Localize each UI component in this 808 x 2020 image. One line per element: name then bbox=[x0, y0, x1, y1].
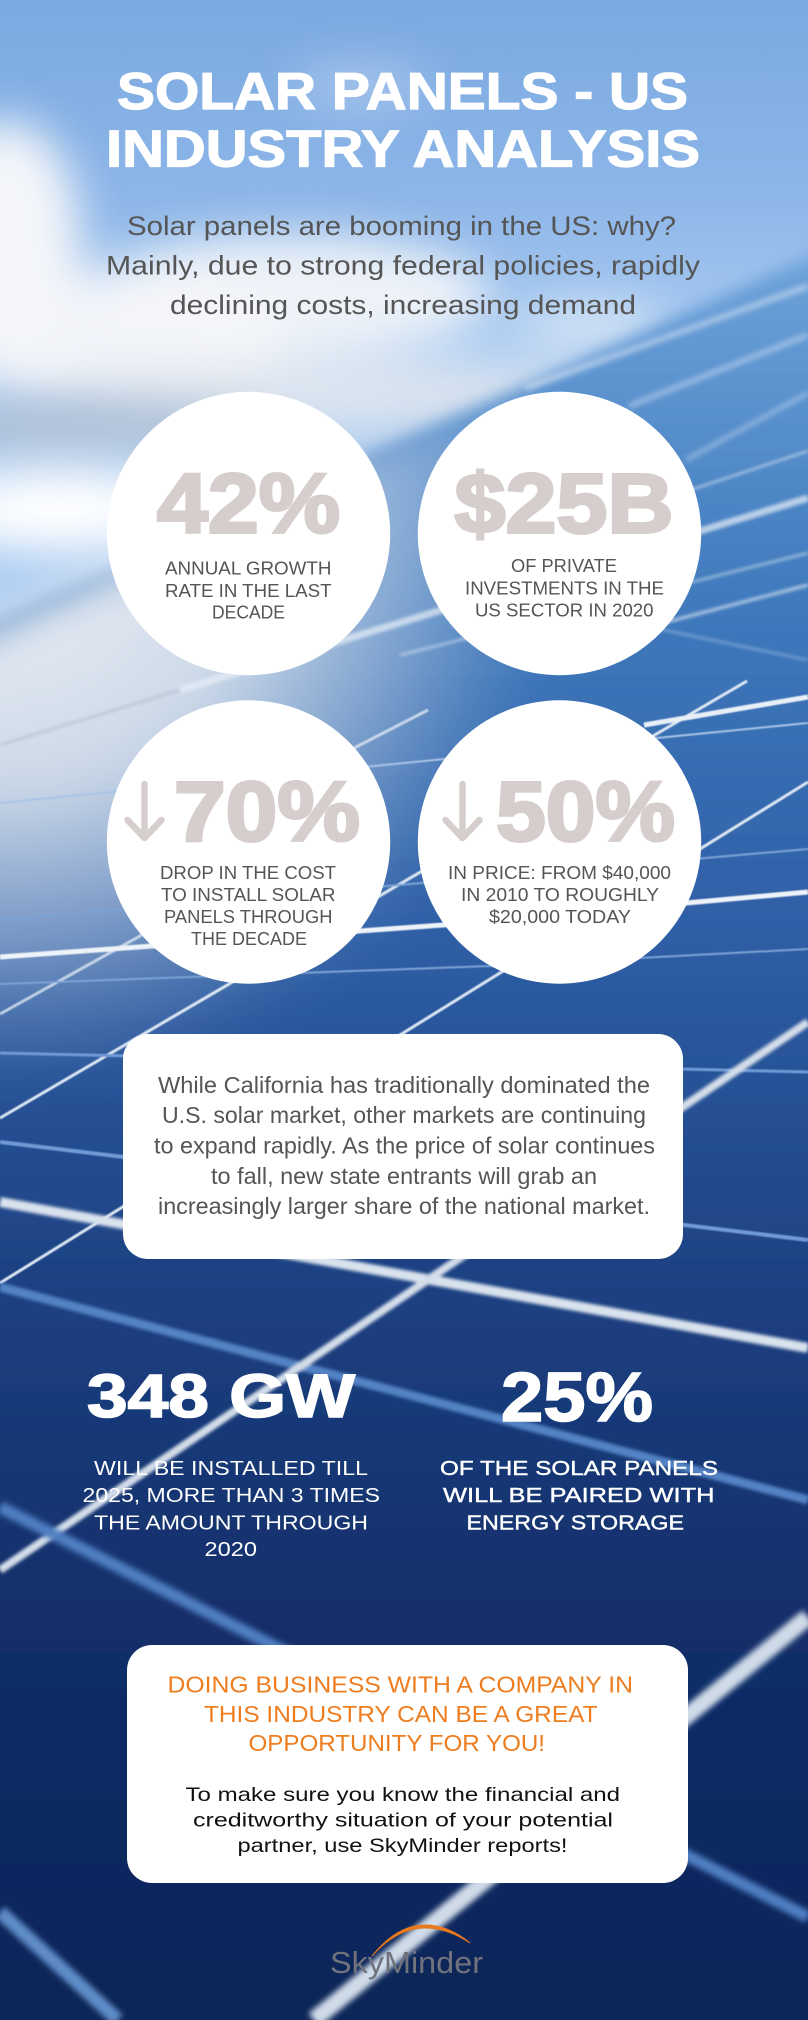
stat circle: 42% annual growth: DECADE bbox=[212, 602, 285, 622]
call to action heading bbox=[168, 1672, 633, 1756]
stat circle: 70% cost drop: 70% bbox=[174, 764, 360, 858]
stat circle: $25B private investments: OF PRIVATE bbox=[511, 555, 617, 576]
stat circle: 70% cost drop: THE DECADE bbox=[191, 928, 307, 949]
title: INDUSTRY ANALYSIS bbox=[106, 120, 700, 178]
logo: SkyMinder: SkyMinder bbox=[330, 1945, 483, 1980]
icon: down arrow bbox=[446, 784, 480, 838]
call to action heading: THIS INDUSTRY CAN BE A GREAT bbox=[204, 1701, 598, 1727]
stat circle: $25B private investments bbox=[418, 392, 701, 675]
panel: California market text: While California has traditionally dominated the bbox=[158, 1072, 650, 1098]
panel: call to action bbox=[127, 1645, 688, 1883]
stat: 25% paired with storage: ENERGY STORAGE bbox=[466, 1512, 684, 1534]
stat circle: $25B private investments: $25B bbox=[454, 456, 674, 550]
logo: SkyMinder bbox=[330, 1925, 483, 1980]
stat: 348 GW installed: WILL BE INSTALLED TILL bbox=[94, 1457, 368, 1480]
panel: California market text: to expand rapidly. As the price of solar continues bbox=[154, 1132, 655, 1158]
title: SOLAR PANELS - US bbox=[117, 63, 688, 121]
subtitle: Solar panels are booming in the US: why? bbox=[127, 211, 676, 241]
stat circle: 70% cost drop bbox=[107, 700, 390, 984]
panel: California market text: increasingly larger share of the national market. bbox=[158, 1193, 650, 1219]
stat: 25% paired with storage: 25% bbox=[501, 1358, 653, 1436]
subtitle bbox=[106, 211, 701, 320]
stat: 348 GW installed: 348 GW bbox=[87, 1362, 356, 1430]
call to action body: To make sure you know the financial and bbox=[186, 1784, 620, 1806]
call to action body: creditworthy situation of your potential bbox=[193, 1810, 613, 1832]
stat circle: 50% price drop: IN PRICE: FROM $40,000 bbox=[448, 862, 671, 883]
title bbox=[106, 63, 700, 178]
call to action heading: OPPORTUNITY FOR YOU! bbox=[248, 1730, 545, 1756]
stat circle: $25B private investments: INVESTMENTS IN THE bbox=[465, 578, 664, 598]
call to action body: partner, use SkyMinder reports! bbox=[238, 1835, 568, 1857]
stat circle: 42% annual growth bbox=[107, 392, 390, 675]
stat circle: 42% annual growth: RATE IN THE LAST bbox=[165, 580, 332, 601]
stat circle: 42% annual growth: 42% bbox=[157, 456, 340, 550]
stat: 348 GW installed: 2020 bbox=[204, 1538, 257, 1561]
panel: California market text bbox=[123, 1034, 683, 1259]
icon: down arrow bbox=[128, 784, 162, 838]
stat: 25% paired with storage bbox=[440, 1358, 718, 1534]
stat circle: 70% cost drop: PANELS THROUGH bbox=[164, 906, 332, 927]
stat circle: $25B private investments: US SECTOR IN 2020 bbox=[475, 600, 654, 620]
stat: 348 GW installed: THE AMOUNT THROUGH bbox=[94, 1512, 368, 1534]
stat circle: 50% price drop: IN 2010 TO ROUGHLY bbox=[461, 884, 659, 905]
stat circle: 70% cost drop: DROP IN THE COST bbox=[160, 862, 336, 883]
stat circle: 50% price drop: 50% bbox=[496, 764, 675, 858]
subtitle: Mainly, due to strong federal policies, rapidly bbox=[106, 250, 701, 280]
stat circle: 70% cost drop: TO INSTALL SOLAR bbox=[161, 884, 336, 905]
call to action heading: DOING BUSINESS WITH A COMPANY IN bbox=[168, 1672, 633, 1698]
call to action body bbox=[186, 1784, 620, 1857]
stat circle: 50% price drop bbox=[418, 700, 701, 984]
stat circle: 50% price drop: $20,000 TODAY bbox=[489, 906, 631, 927]
subtitle: declining costs, increasing demand bbox=[170, 290, 636, 320]
stat: 25% paired with storage: OF THE SOLAR PANELS bbox=[440, 1457, 718, 1480]
panel: California market text: U.S. solar market, other markets are continuing bbox=[162, 1102, 646, 1128]
stat: 348 GW installed bbox=[82, 1362, 380, 1561]
stat: 25% paired with storage: WILL BE PAIRED WITH bbox=[443, 1484, 714, 1507]
panel: California market text: to fall, new state entrants will grab an bbox=[211, 1163, 597, 1189]
stat: 348 GW installed: 2025, MORE THAN 3 TIMES bbox=[82, 1484, 380, 1507]
stat circle: 42% annual growth: ANNUAL GROWTH bbox=[165, 558, 332, 578]
